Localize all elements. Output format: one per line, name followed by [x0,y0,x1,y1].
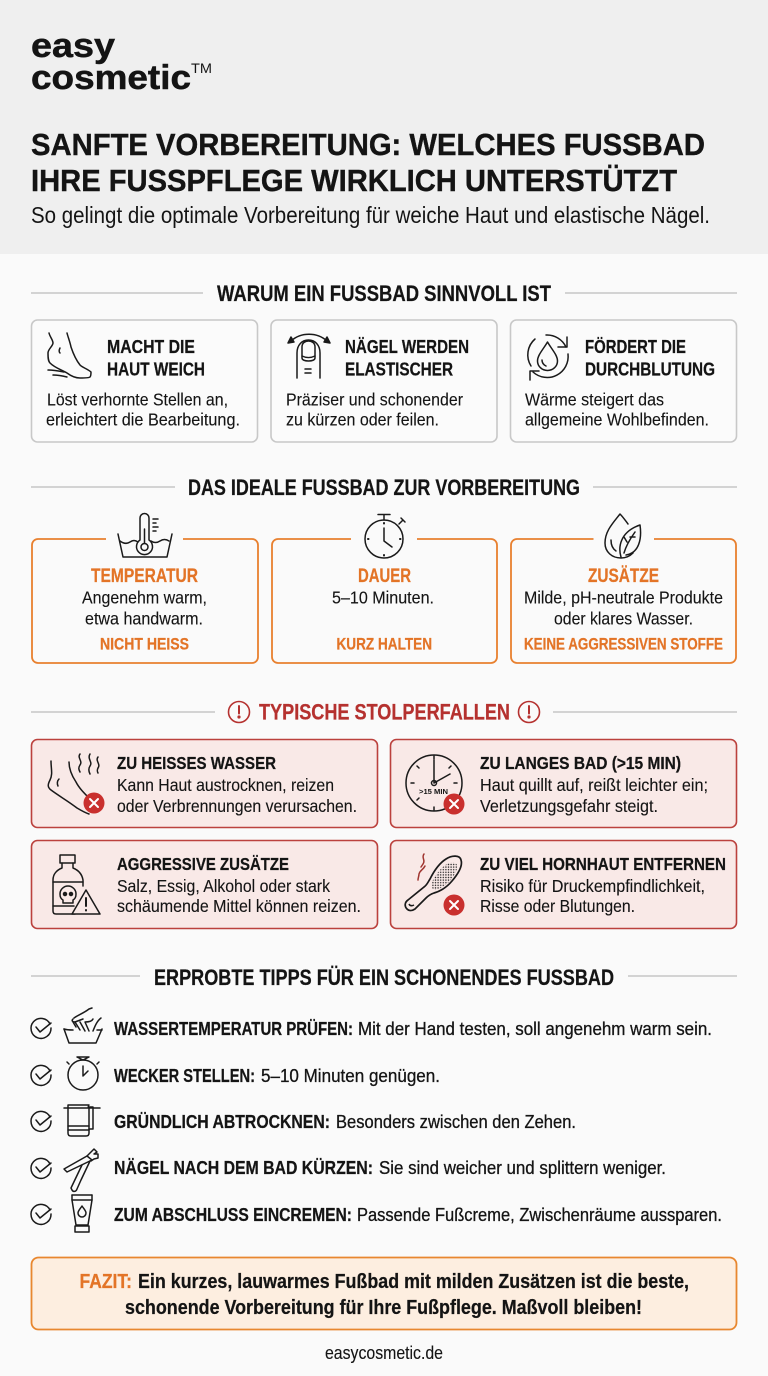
callout: fazit: FAZIT: [80,1271,132,1293]
panel: zu viel hornhaut entfernen: Risiko für Druckempfindlichkeit, [480,876,705,896]
icon: nail clipper [64,1149,98,1191]
panel: dauer [272,514,497,663]
panel: temperatur: NICHT HEISS [100,636,189,654]
icon: check [31,1158,51,1178]
section heading: stolperfallen [31,700,737,724]
panel: zusätze: Milde, pH-neutrale Produkte [524,588,723,608]
callout: fazit: schonende Vorbereitung für Ihre Fußpflege. Maßvoll bleiben! [125,1297,642,1319]
panel: dauer: 5–10 Minuten. [332,588,434,608]
icon: towel [64,1105,100,1136]
panel: zu viel hornhaut entfernen: ZU VIEL HORNHAUT ENTFERNEN [480,854,726,874]
callout: fazit [32,1258,736,1330]
icon: cream tube [72,1195,92,1232]
panel: nägel werden elastischer: NÄGEL WERDEN [345,336,469,357]
panel: zu langes bad: >15 MIN [419,787,448,796]
panel: macht die haut weich: HAUT WEICH [107,358,205,380]
tip: wassertemperatur: Mit der Hand testen, soll angenehm warm sein. [358,1019,712,1039]
panel: fördert die durchblutung: FÖRDERT DIE [585,336,686,357]
panel: zu heisses wasser: ZU HEISSES WASSER [117,753,276,773]
panel: fördert die durchblutung: DURCHBLUTUNG [585,358,715,380]
panel: temperatur: Angenehm warm, [82,588,207,608]
section heading: ideales fussbad: DAS IDEALE FUSSBAD ZUR VORBEREITUNG [188,475,580,500]
panel: zusätze [511,514,736,663]
panel: zu heisses wasser: Kann Haut austrocknen, reizen [117,775,334,795]
title [31,127,705,198]
panel: nägel werden elastischer [271,320,497,442]
panel: fördert die durchblutung [510,320,736,442]
icon: foot with steam [48,754,99,814]
tip: abtrocknen: GRÜNDLICH ABTROCKNEN: [114,1112,330,1132]
panel: nägel werden elastischer: ELASTISCHER [345,358,453,380]
panel: temperatur: etwa handwarm. [85,608,203,628]
logo: cosmetic [31,59,191,97]
panel: macht die haut weich: MACHT DIE [107,336,195,357]
panel: zusätze: oder klares Wasser. [554,608,693,628]
panel: macht die haut weich: Löst verhornte Stellen an, [47,390,228,410]
tip: wassertemperatur: WASSERTEMPERATUR PRÜFEN: [114,1019,353,1039]
logo: TM [191,60,212,76]
panel: nägel werden elastischer: zu kürzen oder feilen. [286,410,439,430]
panel: aggressive zusätze: Salz, Essig, Alkohol oder stark [117,876,330,896]
panel: zu langes bad [390,740,736,828]
icon: warning right [518,702,540,722]
logo [31,27,212,97]
icon: error badge [444,794,464,814]
panel: dauer: KURZ HALTEN [336,636,432,654]
panel: zu heisses wasser: oder Verbrennungen verursachen. [117,796,357,816]
title: IHRE FUSSPFLEGE WIRKLICH UNTERSTÜTZT [31,163,677,198]
tip: nägel kürzen: Sie sind weicher und splittern weniger. [379,1158,666,1178]
tip: wassertemperatur [31,1008,712,1043]
icon: stopwatch [67,1057,99,1090]
icon: check [31,1065,51,1085]
panel: zu heisses wasser [32,740,378,828]
tip: wecker: WECKER STELLEN: [114,1066,255,1086]
panel: zusätze: ZUSÄTZE [588,564,659,587]
panel: aggressive zusätze: AGGRESSIVE ZUSÄTZE [117,854,289,874]
icon: check [31,1111,51,1131]
icon: stopwatch [365,514,405,558]
icon: drop and leaf [605,514,641,558]
panel: macht die haut weich: erleichtert die Bearbeitung. [46,410,240,430]
tip: abtrocknen: Besonders zwischen den Zehen. [336,1112,576,1132]
icon: poison bottle with warning [53,855,100,914]
panel: nägel werden elastischer: Präziser und schonender [286,390,463,410]
panel: temperatur: TEMPERATUR [91,565,198,587]
panel: aggressive zusätze [32,840,378,928]
icon: foot file [405,854,461,910]
logo: easy [31,27,115,65]
tip: eincremen [31,1195,722,1232]
icon: foot [48,333,91,378]
tip: nägel kürzen: NÄGEL NACH DEM BAD KÜRZEN: [114,1158,373,1178]
icon: thermometer in basin [118,514,172,557]
panel: zu langes bad: Haut quillt auf, reißt leichter ein; [480,775,708,795]
header band [0,0,768,254]
icon: warning left [228,702,250,722]
icon: error badge [444,894,464,916]
tip: nägel kürzen [31,1149,666,1191]
section heading: warum: WARUM EIN FUSSBAD SINNVOLL IST [217,281,551,306]
panel: fördert die durchblutung: Wärme steigert das [525,390,664,410]
tip: eincremen: ZUM ABSCHLUSS EINCREMEN: [114,1205,352,1225]
panel: zu viel hornhaut entfernen [390,840,736,928]
section heading: tipps: ERPROBTE TIPPS FÜR EIN SCHONENDES FUSSBAD [154,965,614,990]
icon: water drop cycle [528,335,568,380]
icon: hand in basin [64,1008,102,1043]
panel: fördert die durchblutung: allgemeine Wohlbefinden. [525,410,709,430]
panel: dauer: DAUER [358,565,411,587]
panel: zu langes bad: Verletzungsgefahr steigt. [480,796,658,816]
footer url: easycosmetic.de [325,1343,443,1363]
panel: zu langes bad: ZU LANGES BAD (>15 MIN) [480,753,681,773]
icon: error badge [84,792,104,814]
tip: wecker: 5–10 Minuten genügen. [261,1066,440,1086]
panel: zu viel hornhaut entfernen: Risse oder Blutungen. [480,896,635,916]
icon: check [31,1204,51,1224]
section heading: stolperfallen: TYPISCHE STOLPERFALLEN [259,700,510,724]
tip: wecker [31,1057,440,1090]
title: SANFTE VORBEREITUNG: WELCHES FUSSBAD [31,127,705,162]
icon: fingernail [288,334,330,378]
tip: abtrocknen [31,1105,576,1136]
icon: clock [406,755,462,811]
tip: eincremen: Passende Fußcreme, Zwischenräume aussparen. [357,1205,722,1225]
callout: fazit: Ein kurzes, lauwarmes Fußbad mit milden Zusätzen ist die beste, [138,1271,689,1293]
panel: macht die haut weich [32,320,258,442]
icon: check [31,1018,51,1038]
panel: zusätze: KEINE AGGRESSIVEN STOFFE [524,636,723,654]
panel: aggressive zusätze: schäumende Mittel können reizen. [117,896,361,916]
panel: temperatur [32,514,258,663]
